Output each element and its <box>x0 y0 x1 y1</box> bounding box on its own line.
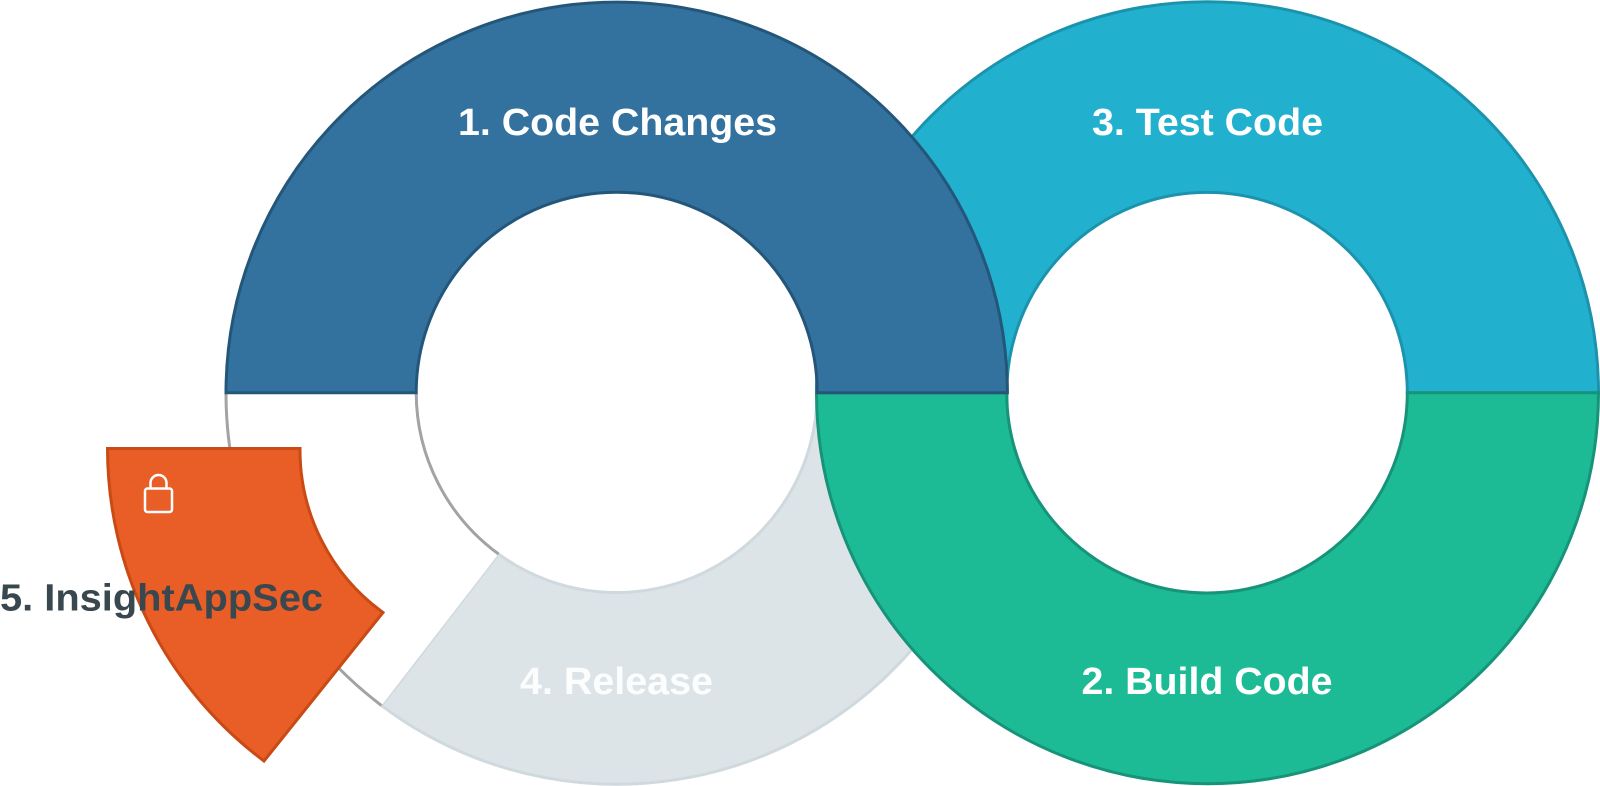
segment: 5. InsightAppSec highlighted <box>0 448 383 761</box>
segment: 1. Code Changes: 1. Code Changes <box>458 102 777 144</box>
segment: 4. Release <box>382 393 1007 784</box>
segment: 3. Test Code: 3. Test Code <box>1092 102 1323 144</box>
segment: 2. Build Code: 2. Build Code <box>1082 661 1332 703</box>
segment: 2. Build Code <box>816 393 1598 784</box>
icon: lock <box>145 475 172 512</box>
segment: empty slot outline <box>226 393 498 706</box>
segment: 1. Code Changes <box>226 2 1007 393</box>
label: 5. InsightAppSec: 5. InsightAppSec <box>0 578 323 620</box>
segment: 4. Release: 4. Release <box>520 661 713 703</box>
segment: 3. Test Code <box>816 2 1598 393</box>
